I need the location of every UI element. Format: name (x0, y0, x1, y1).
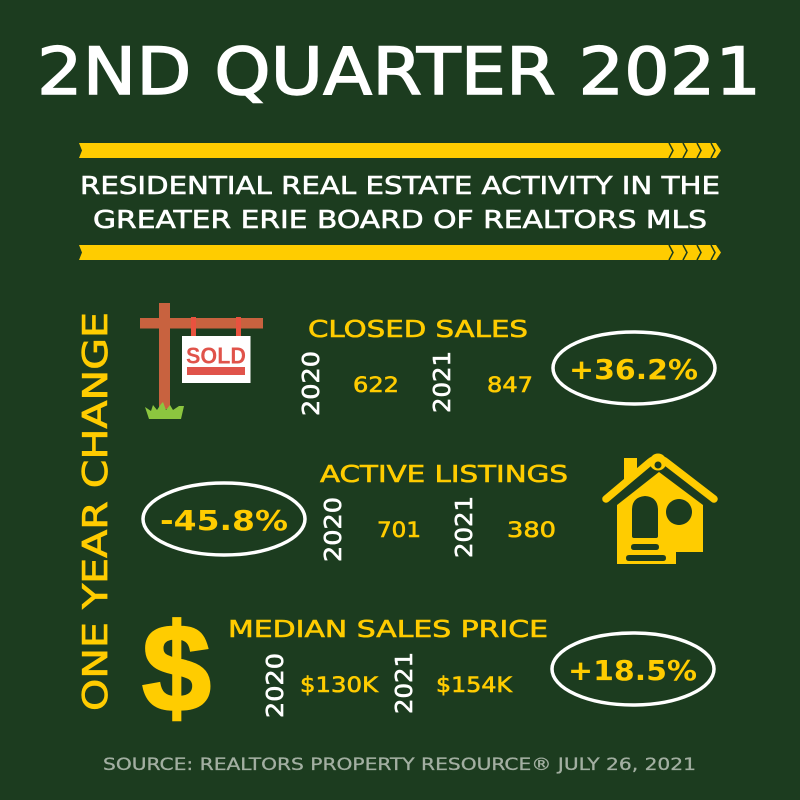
closed sales 2020: 2020 (299, 351, 325, 416)
subtitle: GREATER ERIE BOARD OF REALTORS MLS (93, 205, 707, 234)
closed sales 2021: 847 (487, 373, 533, 397)
closed sales 2021 (430, 351, 533, 413)
source note: SOURCE: REALTORS PROPERTY RESOURCE® JULY 26, 2021 (103, 755, 696, 775)
vertical label: one year change: ONE YEAR CHANGE (76, 312, 116, 711)
bottom arrow banner (79, 245, 721, 260)
callout: -45.8%: -45.8% (160, 504, 288, 537)
median price 2020: $130K (300, 673, 379, 697)
callout: +18.5% (552, 633, 714, 705)
title: 2ND QUARTER 2021 (37, 35, 761, 110)
heading: active listings: ACTIVE LISTINGS (320, 462, 568, 488)
active listings 2021: 2021 (452, 496, 478, 558)
active listings 2021 (452, 496, 556, 558)
active listings 2020: 2020 (321, 497, 347, 562)
median price 2020 (263, 653, 379, 718)
callout: +36.2% (553, 332, 715, 404)
median price 2021: 2021 (392, 652, 418, 714)
heading: closed sales: CLOSED SALES (308, 317, 528, 343)
subtitle: RESIDENTIAL REAL ESTATE ACTIVITY IN THE (80, 171, 720, 200)
subtitle (80, 171, 720, 234)
callout: +18.5%: +18.5% (568, 654, 697, 687)
icon: sold sign (140, 303, 263, 419)
heading: median sales price: MEDIAN SALES PRICE (228, 617, 548, 643)
active listings 2021: 380 (507, 518, 556, 542)
callout: -45.8% (143, 483, 305, 555)
icon: house (606, 454, 714, 564)
median price 2021 (392, 652, 513, 714)
icon: sold sign: SOLD (186, 342, 246, 368)
median price 2021: $154K (436, 673, 513, 697)
active listings 2020: 701 (377, 518, 421, 542)
callout: +36.2%: +36.2% (569, 353, 698, 386)
icon: dollar sign: $ (142, 600, 211, 738)
median price 2020: 2020 (263, 653, 289, 718)
active listings 2020 (321, 497, 421, 562)
top arrow banner (79, 143, 721, 158)
closed sales 2020 (299, 351, 399, 416)
closed sales 2020: 622 (353, 373, 399, 397)
closed sales 2021: 2021 (430, 351, 456, 413)
